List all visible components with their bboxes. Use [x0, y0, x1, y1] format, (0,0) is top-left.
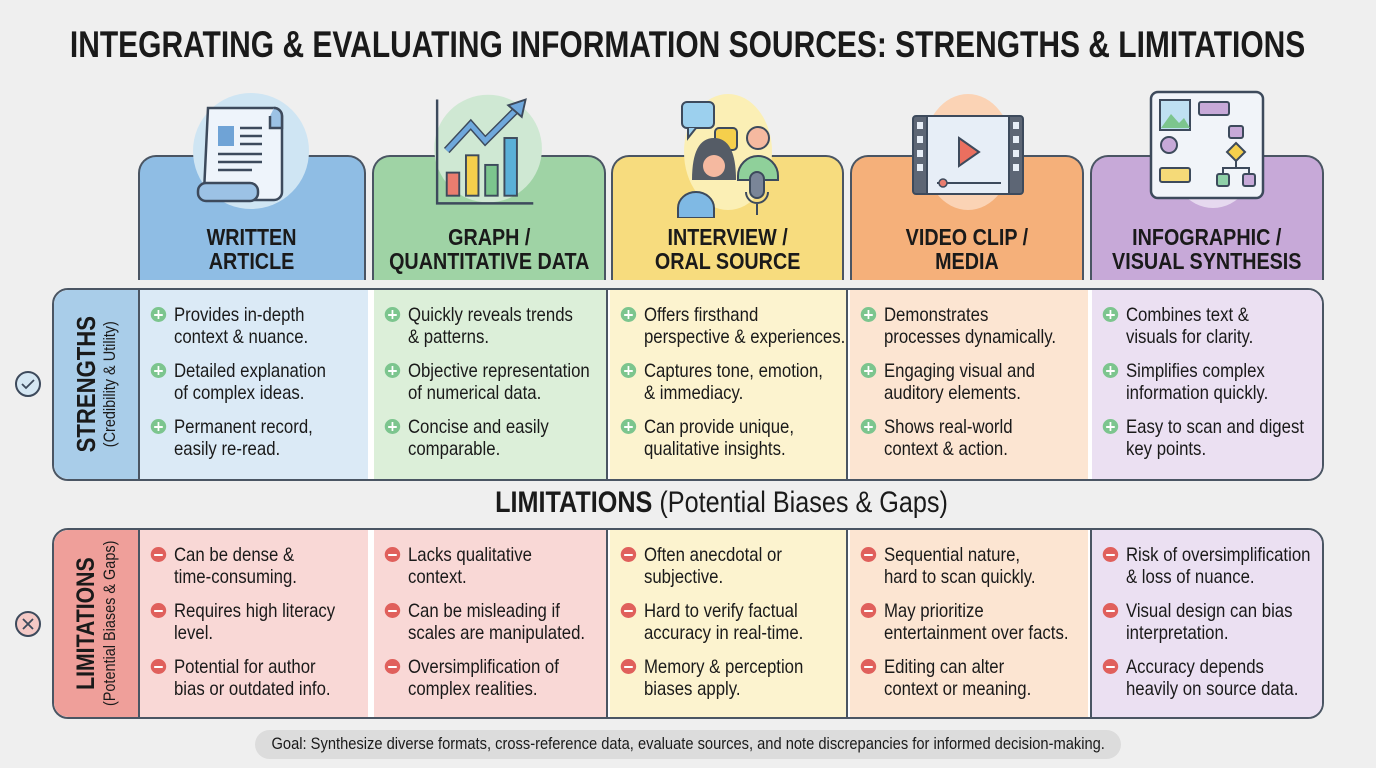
limitations: interview: accuracy in real-time.	[644, 622, 803, 644]
header: written article: ARTICLE	[209, 248, 295, 274]
strengths: video: Demonstrates	[884, 304, 988, 326]
strengths: video: context & action.	[884, 438, 1008, 460]
header: infographic: VISUAL SYNTHESIS	[1112, 248, 1302, 274]
limitations: video: Sequential nature,	[884, 544, 1020, 566]
limitations: written: Potential for author	[174, 656, 316, 678]
limitations: infographic: Visual design can bias	[1126, 600, 1293, 622]
strengths: video	[850, 290, 1088, 479]
limitations: written	[140, 530, 368, 717]
limitations: video: Editing can alter	[884, 656, 1004, 678]
strengths: written: Provides in-depth	[174, 304, 304, 326]
header: interview: INTERVIEW /	[667, 224, 788, 250]
title: INTEGRATING & EVALUATING INFORMATION SOURCES: STRENGTHS & LIMITATIONS	[70, 24, 1306, 65]
strengths: graph: of numerical data.	[408, 382, 541, 404]
limitations: infographic: Accuracy depends	[1126, 656, 1264, 678]
limitations label	[54, 530, 140, 717]
strengths: infographic: key points.	[1126, 438, 1206, 460]
limitations: graph: Can be misleading if	[408, 600, 560, 622]
strengths: interview: Can provide unique,	[644, 416, 794, 438]
header: graph: QUANTITATIVE DATA	[389, 248, 589, 274]
limitations: infographic: & loss of nuance.	[1126, 566, 1255, 588]
limitations: interview: subjective.	[644, 566, 723, 588]
limitations: written: time-consuming.	[174, 566, 297, 588]
limitations: interview	[610, 530, 848, 717]
limitations heading: LIMITATIONS (Potential Biases & Gaps)	[496, 486, 948, 519]
header: written article	[138, 155, 366, 280]
header: video: VIDEO CLIP /	[906, 224, 1028, 250]
strengths: interview: perspective & experiences.	[644, 326, 845, 348]
limitations: infographic: interpretation.	[1126, 622, 1228, 644]
header: video: MEDIA	[935, 248, 999, 274]
strengths: infographic: information quickly.	[1126, 382, 1268, 404]
header: interview: ORAL SOURCE	[655, 248, 800, 274]
panel: strengths row	[52, 288, 1324, 481]
limitations: graph: scales are manipulated.	[408, 622, 585, 644]
strengths: video: Engaging visual and	[884, 360, 1035, 382]
icon: chart	[434, 94, 542, 205]
header: graph	[372, 155, 606, 280]
icon: document	[193, 93, 309, 209]
strengths: graph: comparable.	[408, 438, 500, 460]
header: infographic	[1090, 155, 1324, 280]
limitations: video: entertainment over facts.	[884, 622, 1069, 644]
header: graph: GRAPH /	[448, 224, 530, 250]
strengths label	[54, 290, 140, 479]
limitations: video: May prioritize	[884, 600, 984, 622]
limitations label: (Potential Biases & Gaps)	[100, 541, 119, 706]
limitations: infographic: heavily on source data.	[1126, 678, 1298, 700]
strengths: graph: Objective representation	[408, 360, 590, 382]
icon: infographic	[1150, 90, 1264, 208]
goal footer	[255, 730, 1121, 759]
limitations label: LIMITATIONS	[72, 557, 100, 690]
header: written article: WRITTEN	[207, 224, 297, 250]
header: infographic: INFOGRAPHIC /	[1132, 224, 1282, 250]
limitations: infographic	[1090, 530, 1326, 717]
limitations: interview: Hard to verify factual	[644, 600, 798, 622]
limitations: video	[850, 530, 1088, 717]
strengths: graph: Concise and easily	[408, 416, 549, 438]
panel: limitations row	[52, 528, 1324, 719]
icon: interview	[677, 94, 779, 218]
strengths: infographic: visuals for clarity.	[1126, 326, 1253, 348]
strengths: interview: qualitative insights.	[644, 438, 786, 460]
limitations: graph: complex realities.	[408, 678, 537, 700]
strengths: interview: & immediacy.	[644, 382, 743, 404]
strengths: video: processes dynamically.	[884, 326, 1056, 348]
icon: check circle	[15, 371, 41, 397]
limitations: interview: Often anecdotal or	[644, 544, 782, 566]
strengths: graph: & patterns.	[408, 326, 489, 348]
strengths: infographic	[1092, 290, 1326, 479]
limitations: graph	[374, 530, 608, 717]
strengths label: (Credibility & Utility)	[100, 321, 119, 448]
strengths: graph	[374, 290, 608, 479]
limitations: video: hard to scan quickly.	[884, 566, 1036, 588]
strengths: written: Detailed explanation	[174, 360, 326, 382]
strengths: interview: Offers firsthand	[644, 304, 758, 326]
limitations: written: bias or outdated info.	[174, 678, 331, 700]
limitations: graph: context.	[408, 566, 467, 588]
limitations: written: level.	[174, 622, 213, 644]
limitations: graph: Oversimplification of	[408, 656, 559, 678]
header: interview	[611, 155, 844, 280]
limitations: interview: biases apply.	[644, 678, 741, 700]
icon: x circle	[15, 611, 41, 637]
strengths: written: Permanent record,	[174, 416, 313, 438]
strengths: interview	[610, 290, 848, 479]
strengths: infographic: Easy to scan and digest	[1126, 416, 1304, 438]
limitations: written: Can be dense &	[174, 544, 294, 566]
strengths: video: Shows real-world	[884, 416, 1013, 438]
limitations: video: context or meaning.	[884, 678, 1031, 700]
strengths: infographic: Simplifies complex	[1126, 360, 1265, 382]
strengths: written: context & nuance.	[174, 326, 308, 348]
strengths: video: auditory elements.	[884, 382, 1021, 404]
strengths: written	[140, 290, 368, 479]
limitations: written: Requires high literacy	[174, 600, 335, 622]
strengths: graph: Quickly reveals trends	[408, 304, 573, 326]
goal footer: Goal: Synthesize diverse formats, cross-reference data, evaluate sources, and note discrepancies for informed decision-making.	[271, 735, 1105, 753]
strengths: interview: Captures tone, emotion,	[644, 360, 823, 382]
limitations: graph: Lacks qualitative	[408, 544, 532, 566]
strengths: written: of complex ideas.	[174, 382, 304, 404]
limitations: interview: Memory & perception	[644, 656, 803, 678]
strengths: written: easily re-read.	[174, 438, 280, 460]
header: video	[850, 155, 1084, 280]
strengths: infographic: Combines text &	[1126, 304, 1249, 326]
icon: video	[912, 94, 1024, 210]
limitations: infographic: Risk of oversimplification	[1126, 544, 1310, 566]
strengths label: STRENGTHS	[71, 316, 101, 453]
